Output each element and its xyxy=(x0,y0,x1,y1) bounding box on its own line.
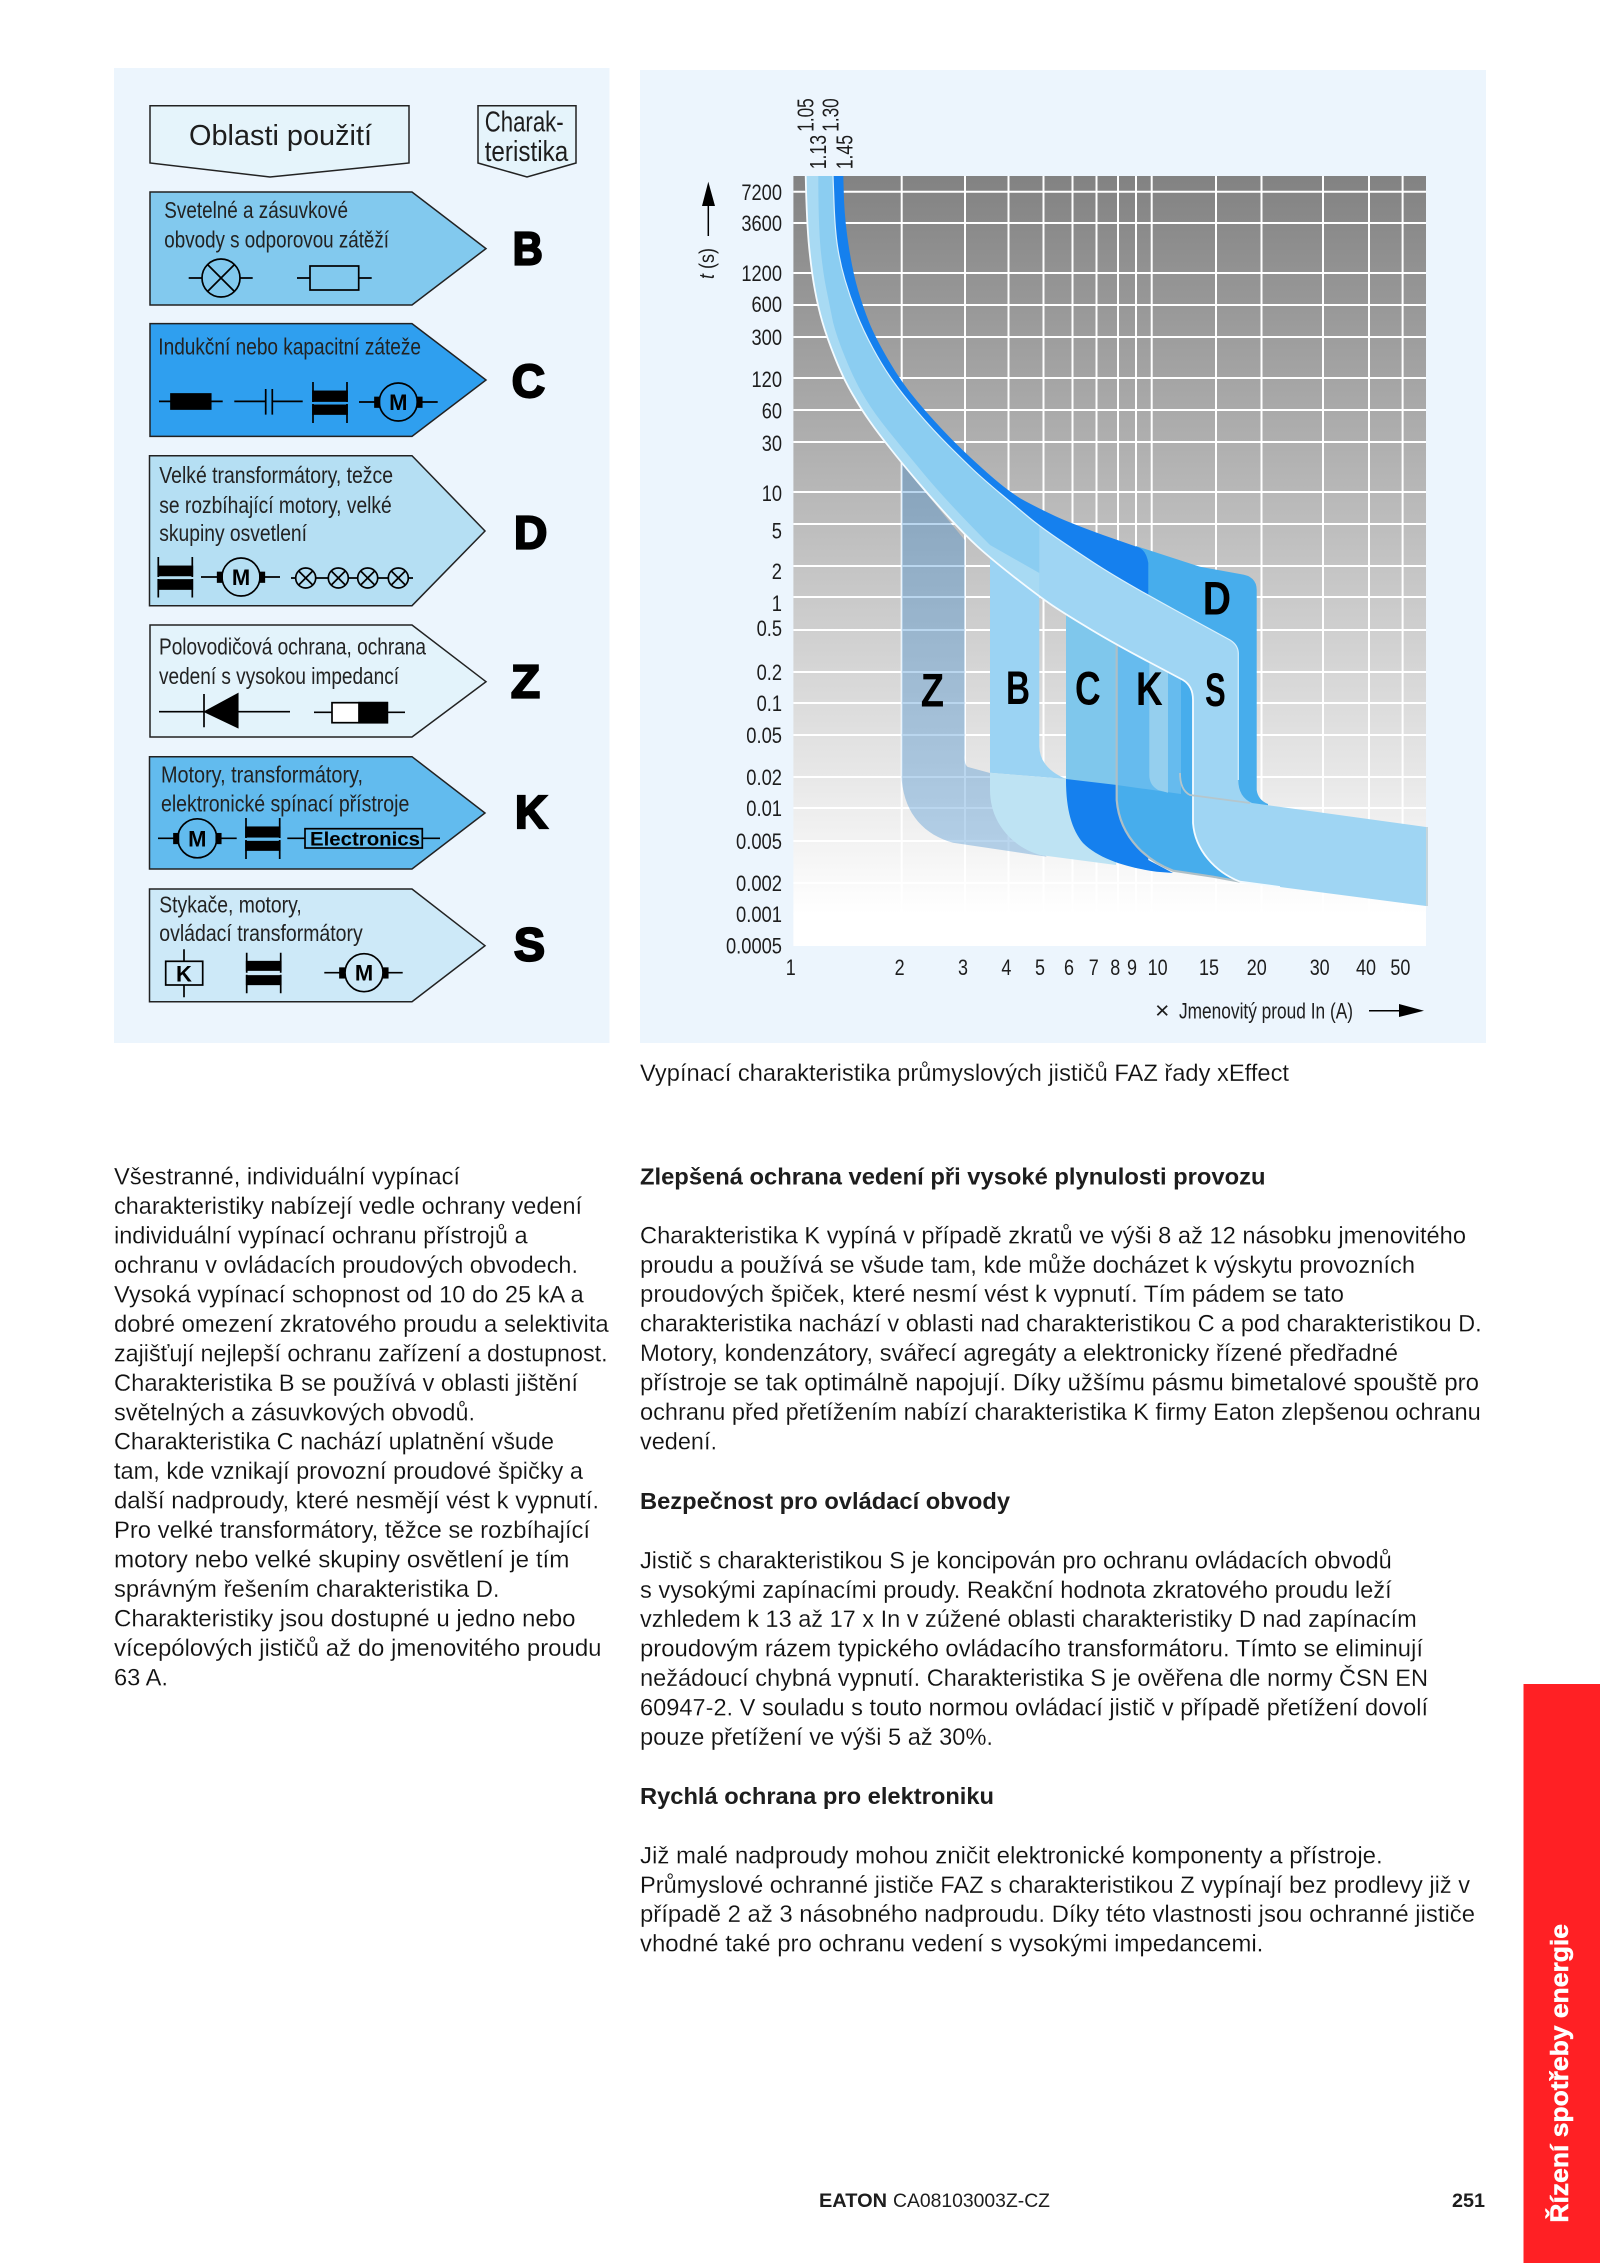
y axis labels: 1 xyxy=(772,591,782,616)
x axis labels: 2 xyxy=(895,955,905,980)
icon: transformer, motor, lamps xyxy=(158,557,413,598)
text block: left column: Charakteristika B se používá v oblasti jištění xyxy=(114,1370,578,1397)
chart caption: Vypínací charakteristika průmyslových jističů FAZ řady xEffect xyxy=(640,1060,1289,1087)
text block: fast protection for electronics xyxy=(640,1783,1475,1958)
y axis labels: 0.5 xyxy=(757,616,782,641)
text block: left column: Vysoká vypínací schopnost od 10 do 25 kA a xyxy=(114,1281,584,1308)
x axis labels: 30 xyxy=(1310,955,1330,980)
row K: M xyxy=(188,826,206,851)
y axis labels: 0.01 xyxy=(746,796,782,821)
paragraph: vzhledem k 13 až 17 x In v zúžené oblasti charakteristiky D nad zapínacím xyxy=(640,1606,1417,1633)
y axis labels: 0.2 xyxy=(757,660,782,685)
row Z: Polovodičová ochrana, ochrana xyxy=(159,633,426,659)
row B xyxy=(150,192,486,305)
curve: Z band xyxy=(878,435,1047,857)
chart letters: Z xyxy=(921,664,944,717)
y axis labels: 2 xyxy=(772,559,782,584)
x axis labels: 20 xyxy=(1247,955,1267,980)
footer: document reference: EATON xyxy=(819,2191,887,2212)
row C: Indukční nebo kapacitní záteže xyxy=(158,334,421,360)
text block: left column: zajišťují nejlepší ochranu zařízení a dostupnost. xyxy=(114,1340,608,1367)
curve: C band xyxy=(830,176,1173,873)
y axis labels: 7200 xyxy=(741,180,782,205)
paragraph: Průmyslové ochranné jističe FAZ s charakteristikou Z vypínají bez prodlevy již v xyxy=(640,1872,1470,1899)
x axis labels: 5 xyxy=(1035,955,1045,980)
text block: left column: dobré omezení zkratového proudu a selektivita xyxy=(114,1311,609,1338)
x axis labels: 9 xyxy=(1127,955,1137,980)
x axis labels: 6 xyxy=(1064,955,1074,980)
y axis labels: 0.002 xyxy=(736,871,782,896)
letter K: K xyxy=(515,786,548,838)
x axis title and arrow: × xyxy=(1155,998,1170,1025)
paragraph: Motory, kondenzátory, svářecí agregáty a elektronicky řízené předřadné xyxy=(640,1340,1398,1367)
text block: left column: motory nebo velké skupiny osvětlení je tím xyxy=(114,1547,569,1574)
text block: left column: správným řešením charakteristika D. xyxy=(114,1576,500,1603)
paragraph xyxy=(640,1842,1475,1958)
side tab xyxy=(1524,1684,1600,2263)
footer: page number: 251 xyxy=(1452,2191,1485,2212)
letter Z: Z xyxy=(511,655,540,707)
heading: Bezpečnost pro ovládací obvody xyxy=(640,1488,1010,1514)
curve: S and common thermal band xyxy=(806,176,1427,906)
row D: se rozbíhající motory, velké xyxy=(159,492,392,518)
row B: obvody s odporovou zátěží xyxy=(164,226,389,252)
icon: motor, transformer, electronics xyxy=(158,818,440,859)
y axis labels: 600 xyxy=(752,292,782,317)
paragraph: Charakteristika K vypíná v případě zkratů ve výši 8 až 12 násobku jmenovitého xyxy=(640,1222,1466,1249)
text block: control circuit safety xyxy=(640,1488,1428,1751)
plot background and grid xyxy=(793,176,1426,946)
panel: areas of use xyxy=(114,68,610,1043)
header: Oblasti použití: Oblasti použití xyxy=(189,120,372,152)
chart letters xyxy=(921,571,1231,717)
x axis labels: 40 xyxy=(1356,955,1376,980)
text block: left column: Pro velké transformátory, těžce se rozbíhající xyxy=(114,1517,590,1544)
y axis labels: 0.005 xyxy=(736,829,782,854)
row C xyxy=(150,324,486,436)
y axis title and arrow: t (s) xyxy=(696,248,719,279)
text block: left column: Charakteristika C nachází uplatnění všude xyxy=(114,1429,554,1456)
chart letters: K xyxy=(1136,662,1163,715)
text block: left column: světelných a zásuvkových obvodů. xyxy=(114,1399,475,1426)
letter D: D xyxy=(514,507,547,559)
chart letters: B xyxy=(1006,661,1030,714)
text block: left column: Všestranné, individuální vypínací xyxy=(114,1164,460,1190)
y axis labels: 300 xyxy=(752,325,782,350)
row K: Motory, transformátory, xyxy=(161,762,363,788)
x axis labels: 8 xyxy=(1110,955,1120,980)
row K xyxy=(150,757,485,869)
row D: Velké transformátory, težce xyxy=(159,462,393,488)
y axis title and arrow xyxy=(696,182,719,279)
paragraph: proudovým rázem typického ovládacího transformátoru. Tímto se eliminují xyxy=(640,1636,1423,1663)
x axis labels: 3 xyxy=(958,955,968,980)
row D: skupiny osvetlení xyxy=(159,520,308,546)
text block: left column: další nadproudy, které nesmějí vést k vypnutí. xyxy=(114,1488,599,1515)
curve: K band xyxy=(1117,623,1240,882)
paragraph: vedení. xyxy=(640,1428,717,1455)
y axis labels: 5 xyxy=(772,519,782,544)
text block: left column: tam, kde vznikají provozní proudové špičky a xyxy=(114,1458,584,1485)
paragraph: proudových špiček, které nesmí vést k vypnutí. Tím pádem se tato xyxy=(640,1281,1344,1308)
header: Charakteristika xyxy=(478,106,576,177)
paragraph: nežádoucí chybná vypnutí. Charakteristika S je ověřena dle normy ČSN EN xyxy=(640,1664,1428,1692)
text block: improved line protection xyxy=(640,1164,1482,1455)
letter C: C xyxy=(512,355,545,407)
row S xyxy=(150,889,485,1002)
y axis labels: 0.0005 xyxy=(726,934,782,958)
text block: left column: ochranu v ovládacích proudových obvodech. xyxy=(114,1252,578,1279)
text block: left column xyxy=(114,1164,609,1692)
paragraph: případě 2 až 3 násobného nadproudu. Díky této vlastnosti jsou ochranné jističe xyxy=(640,1901,1475,1928)
y axis labels: 60 xyxy=(762,399,782,424)
row B: Svetelné a zásuvkové xyxy=(164,197,348,223)
paragraph: vhodné také pro ochranu vedení s vysokými impedancemi. xyxy=(640,1931,1263,1958)
header: Charakteristika: teristika xyxy=(485,136,569,168)
chart letters: D xyxy=(1203,571,1231,624)
row K: Electronics xyxy=(310,830,420,851)
paragraph: charakteristika nachází v oblasti nad charakteristikou C a pod charakteristikou D. xyxy=(640,1311,1482,1338)
paragraph xyxy=(640,1222,1482,1455)
header: Oblasti použití xyxy=(150,106,409,177)
y axis labels xyxy=(726,180,782,958)
y axis labels: 30 xyxy=(762,431,782,456)
letter B: B xyxy=(513,222,543,274)
row C: M xyxy=(389,390,407,415)
row S: M xyxy=(355,961,373,986)
paragraph: s vysokými zapínacími proudy. Reakční hodnota zkratového proudu leží xyxy=(640,1577,1392,1604)
row D: M xyxy=(232,565,250,590)
top current multiples: 1.45 xyxy=(832,135,858,169)
paragraph xyxy=(640,1547,1428,1751)
y axis labels: 0.1 xyxy=(757,691,782,716)
y axis labels: 0.02 xyxy=(746,765,782,790)
icon: contactor, transformer, motor xyxy=(166,949,403,997)
y axis labels: 0.001 xyxy=(736,902,782,927)
text block: left column: vícepólových jističů až do jmenovitého proudu xyxy=(114,1635,602,1662)
letter S: S xyxy=(514,919,545,971)
row Z xyxy=(150,625,486,737)
y axis labels: 10 xyxy=(762,481,782,506)
x axis labels xyxy=(786,955,1410,980)
row K: elektronické spínací přístroje xyxy=(161,791,409,817)
paragraph: Jistič s charakteristikou S je koncipován pro ochranu ovládacích obvodů xyxy=(640,1547,1392,1574)
paragraph: Již malé nadproudy mohou zničit elektronické komponenty a přístroje. xyxy=(640,1842,1383,1869)
y axis labels: 1200 xyxy=(741,261,782,286)
y axis labels: 120 xyxy=(752,367,782,392)
row S: K xyxy=(176,962,192,987)
heading: Rychlá ochrana pro elektroniku xyxy=(640,1783,994,1809)
row S: ovládací transformátory xyxy=(159,920,363,946)
y axis labels: 3600 xyxy=(741,211,782,236)
paragraph: ochranu před přetížením nabízí charakteristika K firmy Eaton zlepšenou ochranu xyxy=(640,1399,1481,1426)
x axis labels: 4 xyxy=(1001,955,1011,980)
chart letters: S xyxy=(1205,663,1226,716)
footer: document reference xyxy=(819,2191,1050,2212)
curve: B band xyxy=(990,540,1116,865)
top current multiples: 1.05 xyxy=(792,98,818,132)
text block: left column: charakteristiky nabízejí vedle ochrany vedení xyxy=(114,1193,582,1220)
paragraph: proudu a používá se všude tam, kde může docházet k výskytu provozních xyxy=(640,1252,1415,1279)
chart letters: C xyxy=(1075,662,1101,714)
paragraph: 60947-2. V souladu s touto normou ovládací jistič v případě přetížení dovolí xyxy=(640,1695,1428,1722)
header: Charakteristika: Charak- xyxy=(485,106,564,138)
top current multiples: 1.30 xyxy=(817,98,843,132)
y axis labels: 0.05 xyxy=(746,723,782,748)
curve: D band xyxy=(1136,546,1268,850)
heading: Zlepšená ochrana vedení při vysoké plynulosti provozu xyxy=(640,1164,1266,1190)
top current multiples: 1.13 xyxy=(805,135,831,169)
icon: diode and rectifier xyxy=(159,694,405,727)
text block: left column: individuální vypínací ochranu přístrojů a xyxy=(114,1222,528,1249)
x axis labels: 1 xyxy=(786,955,796,980)
paragraph: přístroje se tak optimálně napojují. Díky užšímu pásmu bimetalové spouště pro xyxy=(640,1370,1479,1397)
row S: Stykače, motory, xyxy=(159,892,302,918)
x axis labels: 15 xyxy=(1199,955,1219,980)
text block: left column: Charakteristiky jsou dostupné u jedno nebo xyxy=(114,1606,576,1633)
paragraph: pouze přetížení ve výši 5 až 30%. xyxy=(640,1724,993,1751)
footer: document reference: CA08103003Z-CZ xyxy=(893,2191,1050,2212)
side tab: Řízení spotřeby energie xyxy=(1544,1924,1574,2223)
x axis title and arrow: Jmenovitý proud In (A) xyxy=(1179,999,1353,1024)
x axis labels: 50 xyxy=(1390,955,1410,980)
row D xyxy=(150,456,485,606)
text block: left column: 63 A. xyxy=(114,1664,168,1692)
icon: lamp and resistor xyxy=(189,259,372,297)
x axis labels: 10 xyxy=(1148,955,1168,980)
row Z: vedení s vysokou impedancí xyxy=(159,663,400,689)
panel: tripping characteristic chart xyxy=(640,70,1486,1043)
top current multiples xyxy=(792,98,858,169)
x axis labels: 7 xyxy=(1089,955,1099,980)
icon: inductive and capacitive loads xyxy=(159,382,438,423)
